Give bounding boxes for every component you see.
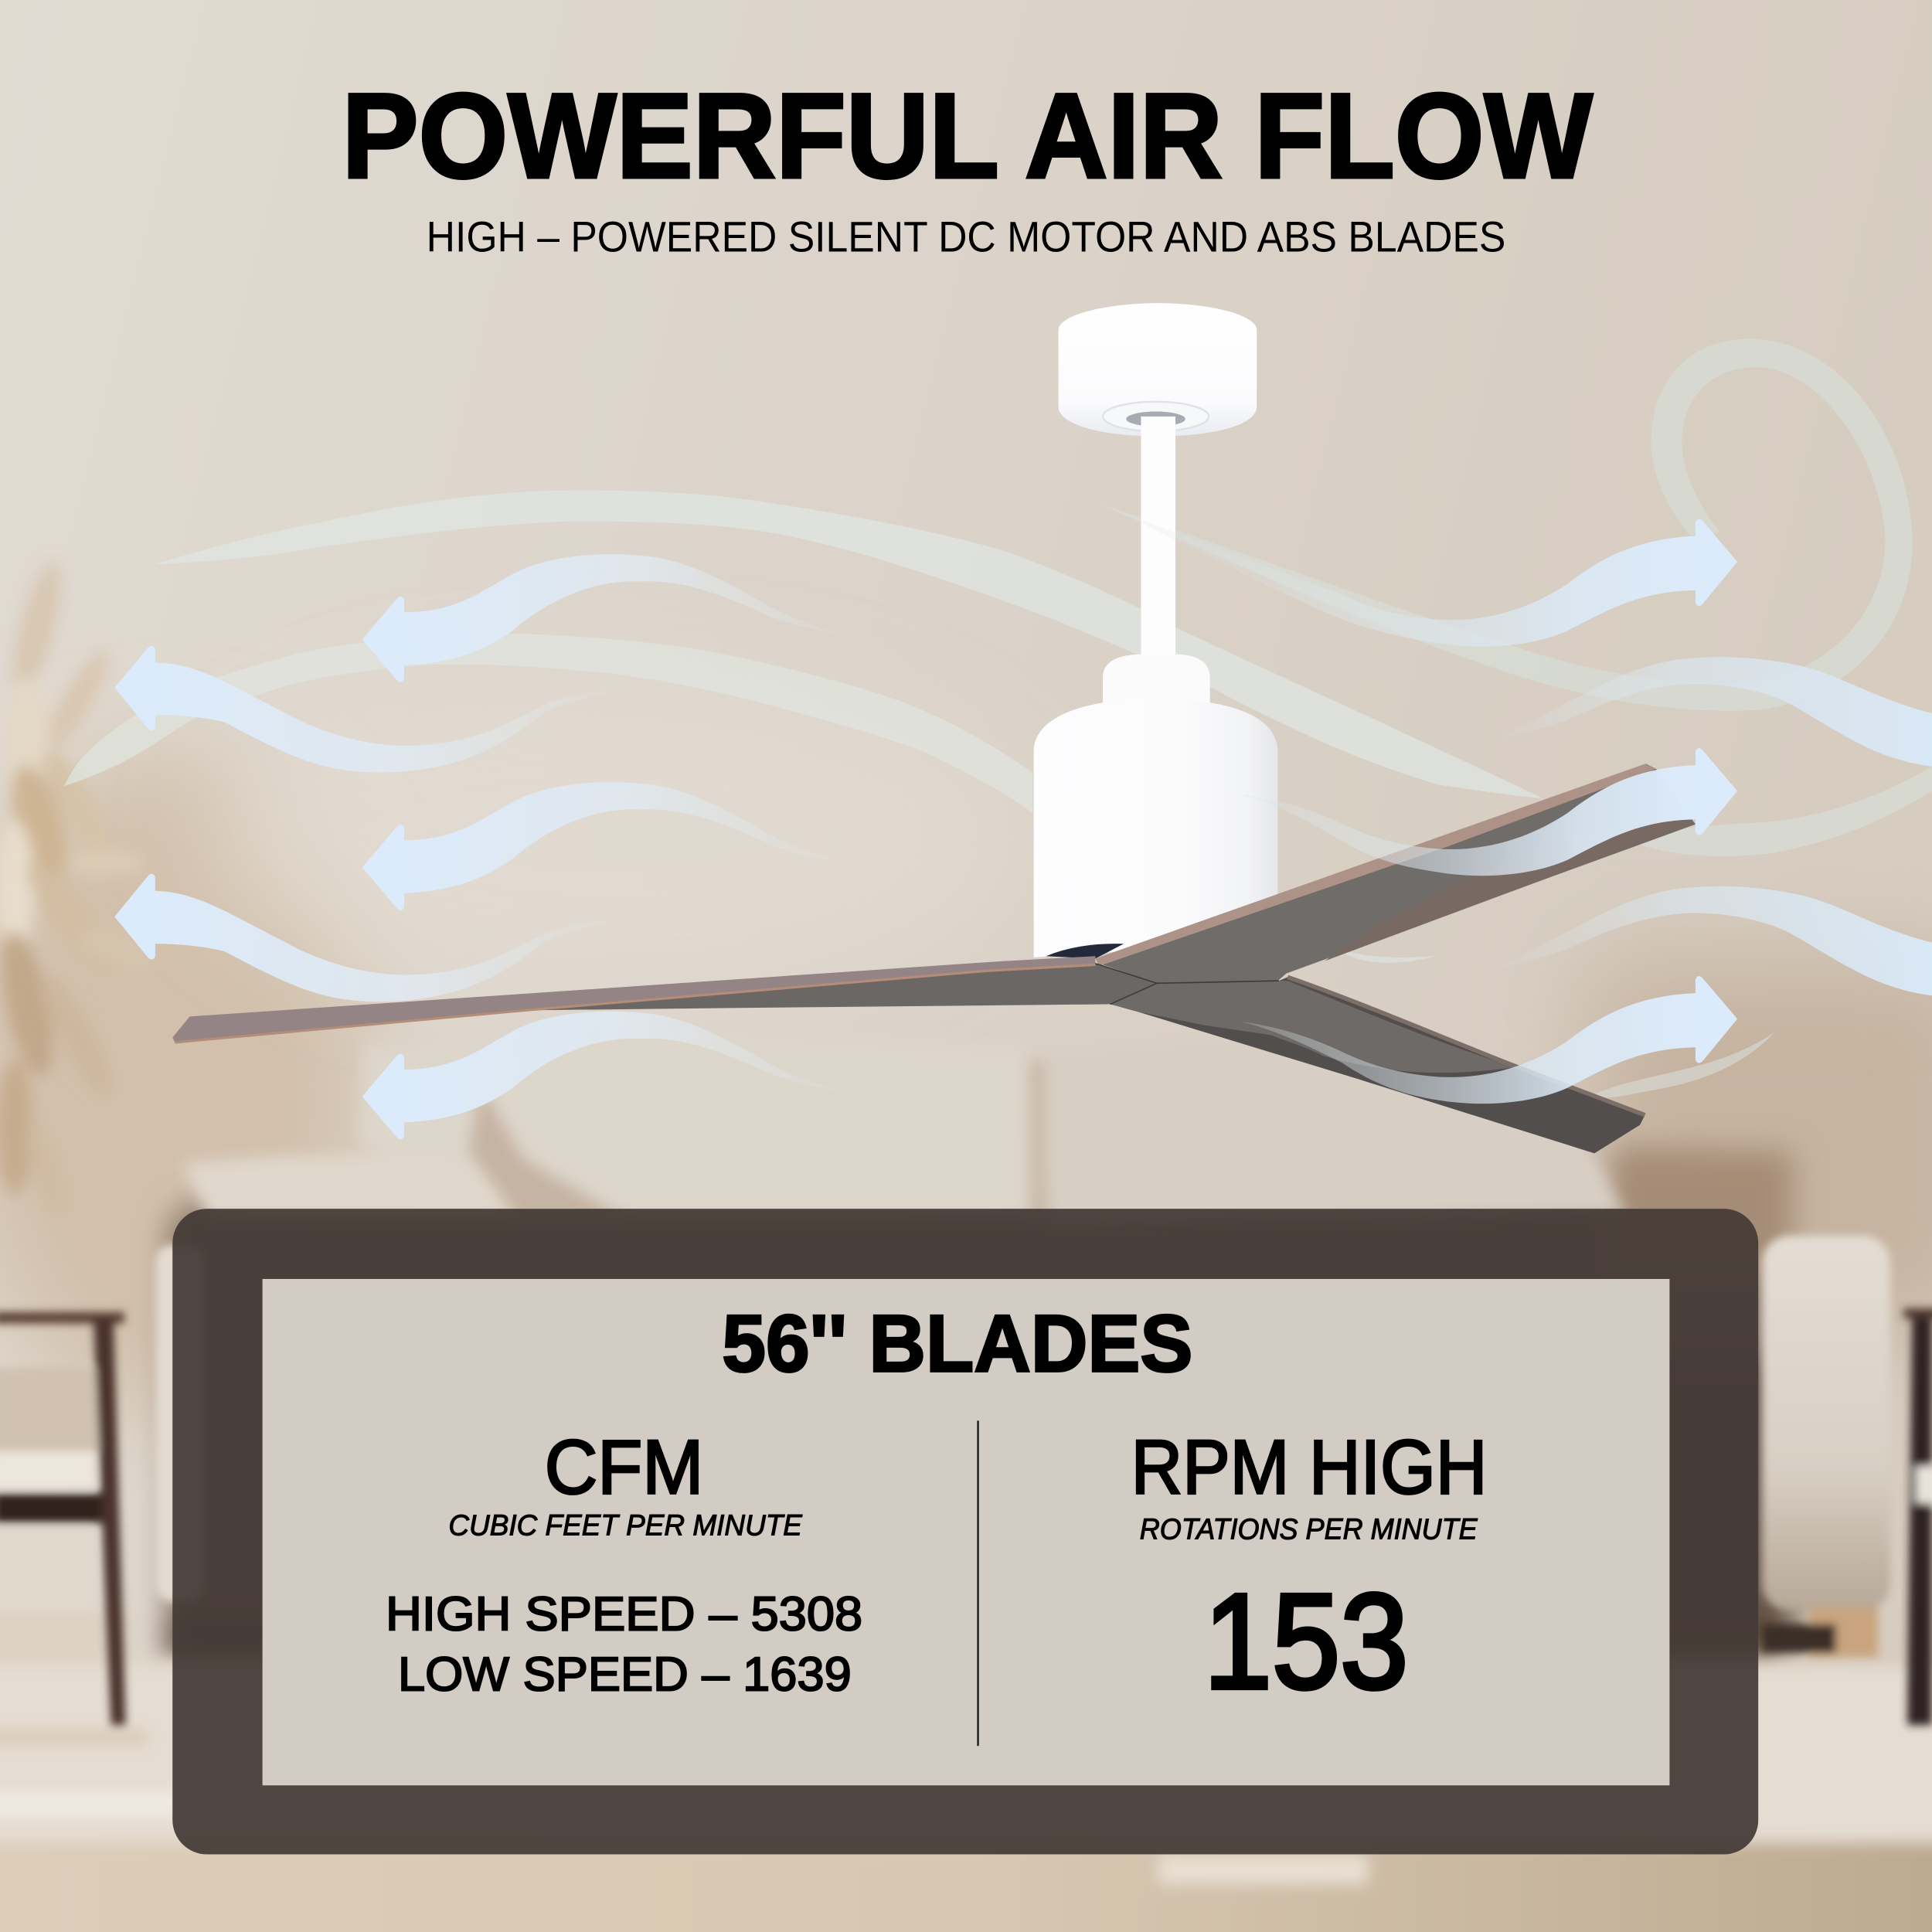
right chair — [1903, 1308, 1932, 1725]
blade: left — [172, 956, 1157, 1043]
downrod — [1141, 417, 1175, 663]
subtitle: HIGH – POWERED SILENT DC MOTOR AND ABS BLADES — [427, 212, 1505, 260]
pale swirl: right loop — [1100, 338, 1913, 711]
pale swirl: upper long band — [154, 491, 1543, 798]
arrow: lower right — [1241, 976, 1737, 1104]
blade size heading: 56'' BLADES — [722, 1299, 1192, 1389]
air tail: upper right — [1491, 657, 1932, 767]
RPM column — [1131, 1424, 1487, 1717]
pale swirl: crescent near lower arrow — [1590, 1032, 1774, 1098]
low speed value: LOW SPEED – 1639 — [398, 1648, 852, 1702]
light inner card — [263, 1279, 1669, 1785]
CFM heading: CFM — [545, 1424, 703, 1509]
motor housing — [1034, 699, 1277, 957]
motor collar — [1103, 655, 1210, 713]
arrow: top right — [1100, 504, 1737, 647]
sofa — [166, 1146, 1797, 1658]
arrow: upper left — [362, 554, 852, 682]
high speed value: HIGH SPEED – 5308 — [386, 1587, 862, 1641]
blade: lower right — [1111, 977, 1645, 1153]
sofa cushions — [182, 1029, 1627, 1226]
CFM column — [386, 1424, 862, 1702]
arrow: far left upper — [114, 646, 628, 773]
ceiling fan — [172, 303, 1696, 1153]
plant — [0, 559, 158, 1222]
RPM value: 153 — [1204, 1566, 1408, 1717]
blade: upper right — [1095, 764, 1696, 983]
floor and rug — [0, 1609, 1932, 1932]
pale swirl: middle long band — [64, 634, 1032, 813]
pale swirl: crescent below motor — [1337, 949, 1435, 963]
sofa arms — [155, 1236, 1890, 1660]
motor underside shadow — [1046, 944, 1124, 958]
arrow: far left lower — [114, 874, 628, 1002]
blade hub seams — [1095, 964, 1279, 1004]
title: POWERFUL AIR FLOW — [342, 70, 1593, 204]
air tail: lower right — [1491, 886, 1932, 995]
arrow: middle right — [1235, 748, 1737, 876]
specifications panel — [172, 1209, 1758, 1855]
dark translucent frame — [172, 1209, 1758, 1855]
arrow: lower left — [362, 1012, 852, 1139]
RPM heading: RPM HIGH — [1131, 1424, 1487, 1509]
pale swirl: lower right band — [1629, 767, 1932, 856]
column divider — [977, 1420, 979, 1746]
left chair — [0, 1312, 126, 1725]
CFM definition: CUBIC FEET PER MINUTE — [448, 1509, 802, 1543]
arrow: middle left — [362, 782, 852, 910]
canopy ring — [1103, 402, 1209, 431]
RPM definition: ROTATIONS PER MINUTE — [1140, 1512, 1478, 1546]
ceiling canopy — [1059, 303, 1257, 436]
